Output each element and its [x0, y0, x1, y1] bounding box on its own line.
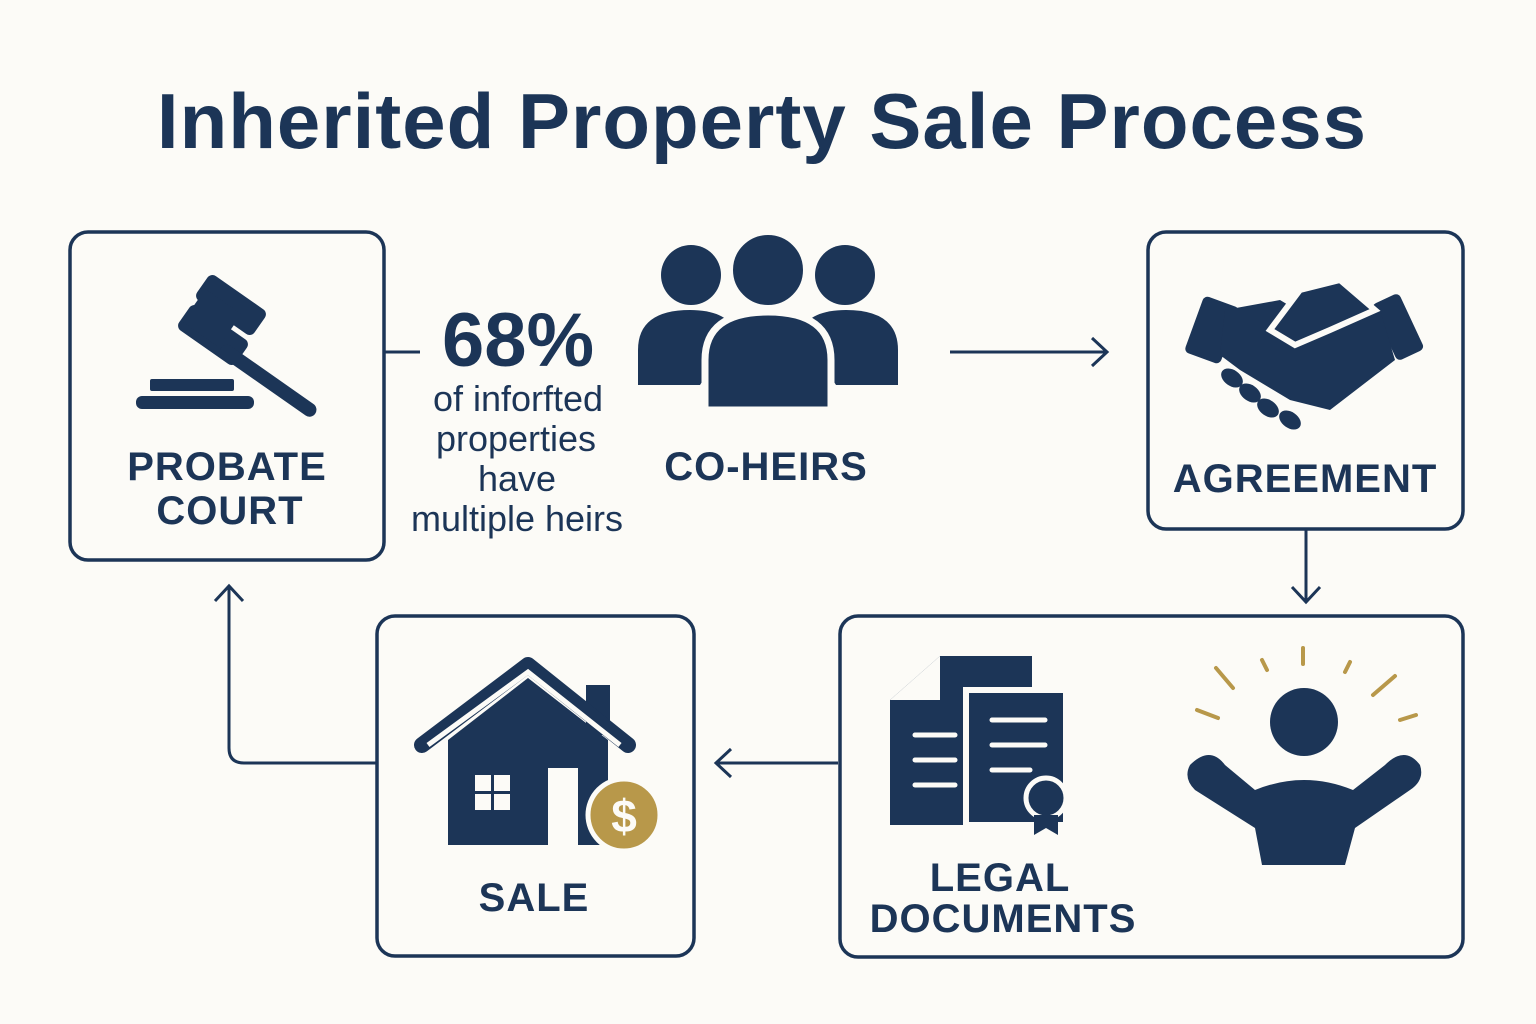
- icon: house with coin: [422, 665, 660, 851]
- panel: legal documents: DOCUMENTS: [870, 897, 1136, 941]
- stat: 68%: multiple heirs: [411, 498, 623, 539]
- icon: celebrating person: [1187, 648, 1421, 865]
- icon: handshake: [1184, 280, 1425, 433]
- label: co-heirs: CO-HEIRS: [664, 445, 868, 489]
- arrow: back to probate: [215, 586, 377, 763]
- panel: agreement: AGREEMENT: [1173, 457, 1437, 501]
- panel: probate court: PROBATE: [127, 445, 327, 489]
- stat: 68%: of inforfted: [433, 378, 603, 419]
- arrow: left to sale: [716, 749, 838, 777]
- panel: legal documents: [840, 616, 1463, 957]
- icon: documents: [890, 656, 1066, 835]
- panel: probate court: COURT: [156, 489, 304, 533]
- panel: agreement: [1148, 232, 1463, 529]
- panel: probate court: [70, 232, 384, 560]
- panel: sale: [377, 616, 694, 956]
- icon: gavel: [136, 273, 319, 419]
- panel: sale: SALE: [479, 876, 589, 920]
- panel: legal documents: LEGAL: [930, 856, 1070, 900]
- arrow: to agreement: [950, 338, 1107, 366]
- stat: 68%: 68%: [442, 298, 594, 383]
- title: Inherited Property Sale Process: [157, 77, 1367, 165]
- stat: 68%: [411, 298, 623, 539]
- stat: 68%: have: [478, 458, 556, 499]
- stat: 68%: properties: [436, 418, 596, 459]
- arrow: down to legal: [1292, 530, 1320, 602]
- icon: house with coin: $: [611, 790, 637, 842]
- icon: co-heirs: [638, 232, 898, 410]
